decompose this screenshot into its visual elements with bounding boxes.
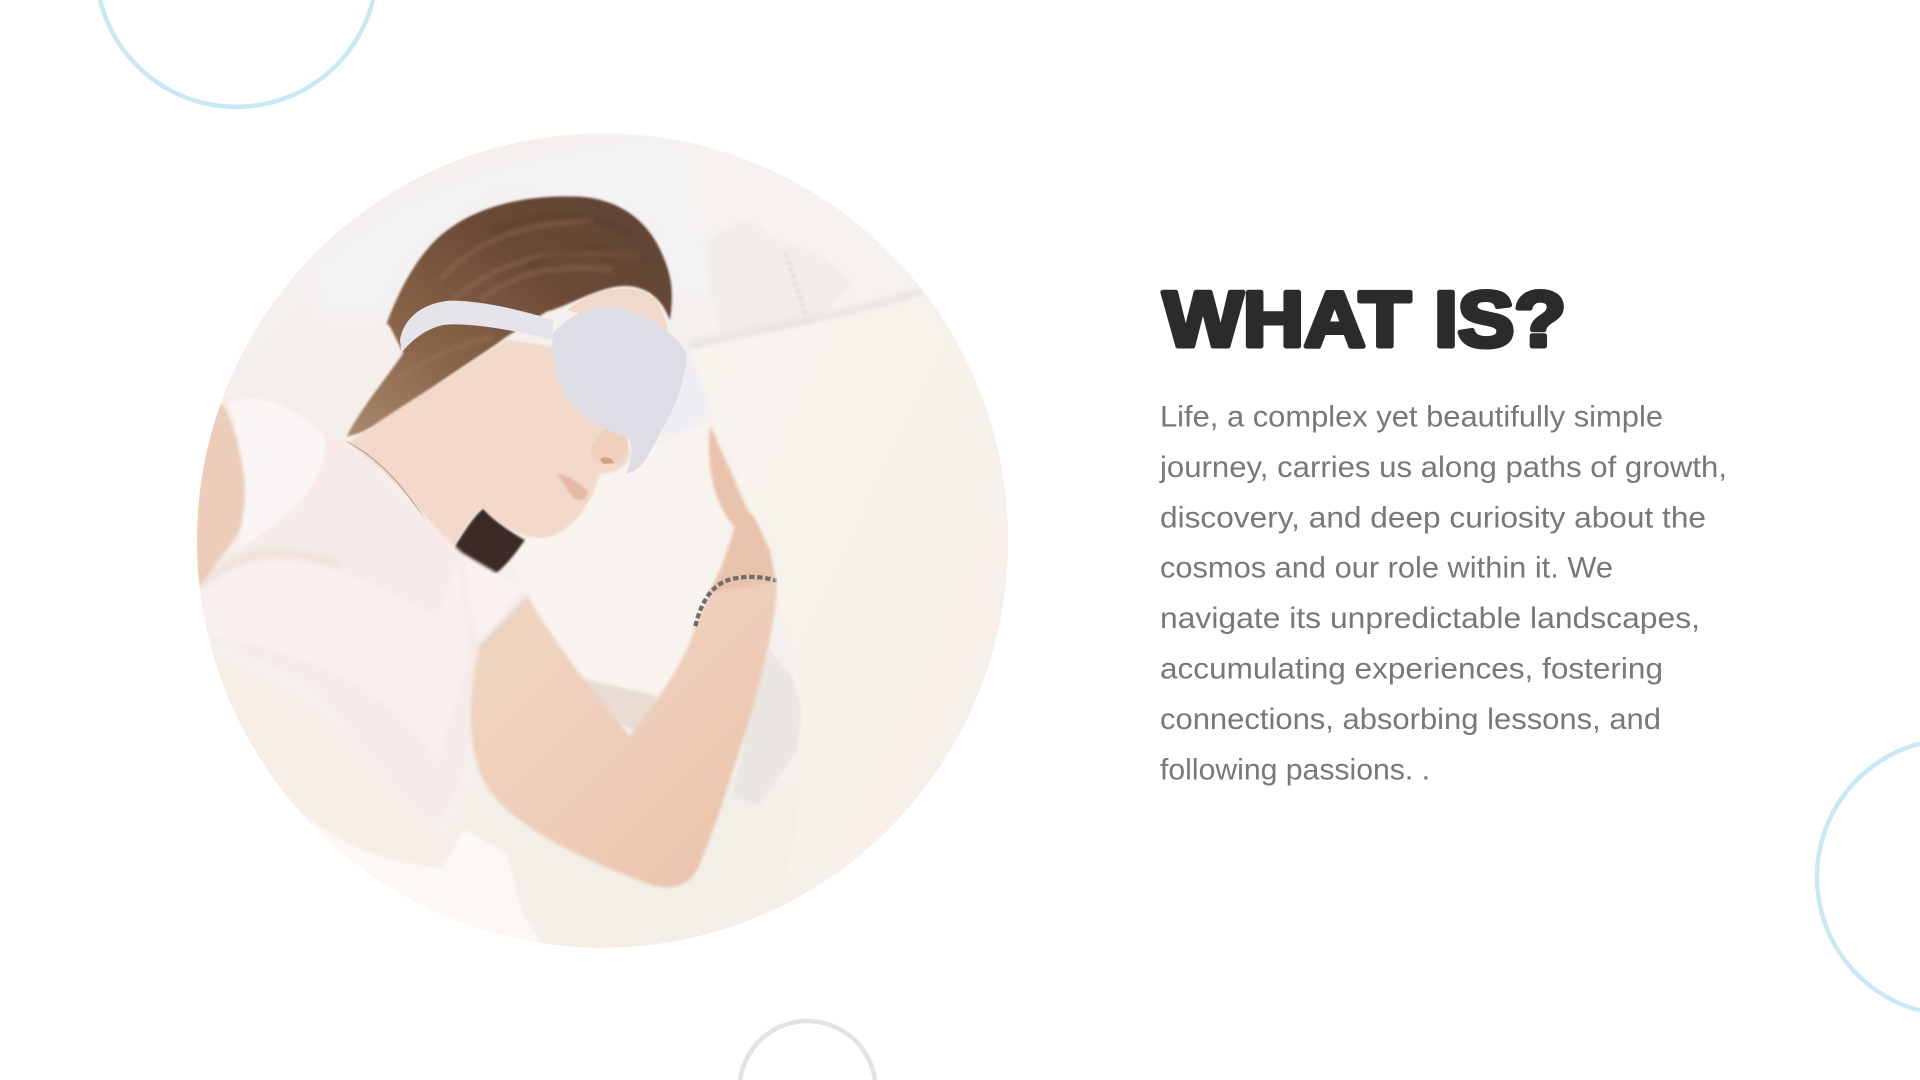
- soft shadows along folds: [204, 550, 528, 635]
- body paragraph: discovery, and deep curiosity about the: [1160, 501, 1706, 534]
- decorative circle: bottom: [740, 1021, 875, 1080]
- body paragraph: navigate its unpredictable landscapes,: [1160, 602, 1700, 635]
- arm: [471, 581, 777, 887]
- decorative circle: top left: [100, 0, 373, 107]
- blanket: [207, 650, 555, 977]
- pajama and lace: [585, 679, 657, 731]
- body paragraph: connections, absorbing lessons, and: [1160, 703, 1661, 736]
- body paragraph: accumulating experiences, fostering: [1160, 652, 1663, 686]
- body paragraph: [1159, 400, 1727, 786]
- circular photo: woman sleeping with eye mask: [191, 131, 1016, 977]
- heading: WHAT IS?: [1163, 275, 1566, 363]
- bottom sheet: [442, 763, 823, 977]
- body paragraph: Life, a complex yet beautifully simple: [1160, 400, 1663, 434]
- large pillow: [752, 514, 808, 720]
- decorative circle: right: [1817, 744, 1920, 1010]
- body paragraph: cosmos and our role within it. We: [1160, 552, 1613, 585]
- body paragraph: following passions. .: [1160, 753, 1430, 786]
- shadow under large pillow: [689, 291, 922, 345]
- head, hair and eye mask: [347, 196, 707, 577]
- shirt: [346, 441, 467, 564]
- bracelet: [695, 577, 777, 626]
- hand: [708, 425, 779, 594]
- body paragraph: journey, carries us along paths of growth,: [1159, 451, 1727, 484]
- shoulder skin: [191, 404, 245, 586]
